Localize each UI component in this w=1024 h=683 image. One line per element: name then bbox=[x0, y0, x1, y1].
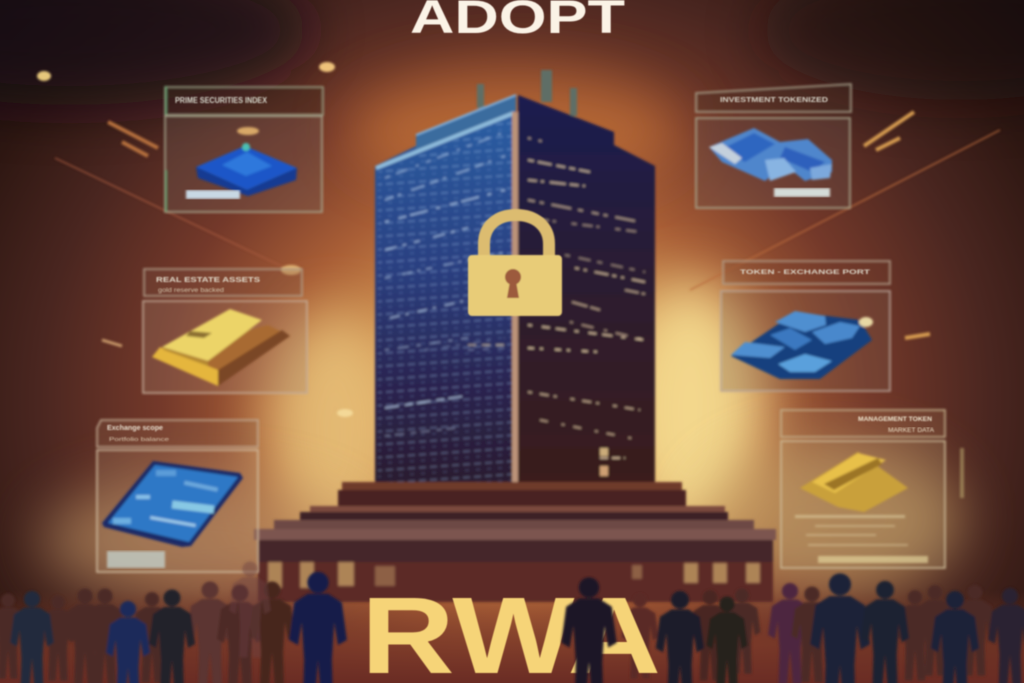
icon: tablet bbox=[102, 461, 243, 547]
small white tag bbox=[107, 551, 165, 568]
tower right face bbox=[518, 95, 655, 482]
panel heading: PRIME SECURITIES INDEX bbox=[175, 96, 268, 105]
panel: lower right gold: MARKET DATA bbox=[888, 428, 934, 434]
small white tag bbox=[774, 188, 830, 197]
panel: lower left tablet: Portfolio balance bbox=[109, 437, 169, 443]
panel heading: TOKEN - EXCHANGE PORT bbox=[740, 269, 870, 276]
icon: blue token bbox=[196, 127, 297, 196]
panel: top right asset bbox=[696, 84, 851, 208]
panel: middle right blue bbox=[721, 261, 890, 391]
center edge bbox=[512, 112, 518, 482]
data lines bbox=[795, 448, 964, 563]
panel heading: REAL ESTATE ASSETS bbox=[156, 275, 260, 284]
padlock icon bbox=[468, 215, 562, 316]
panel heading: Exchange scope bbox=[107, 423, 163, 432]
icon: blue bars bbox=[709, 128, 832, 181]
antennas bbox=[477, 70, 577, 116]
panel: lower right gold bbox=[781, 410, 964, 568]
figure in front of RWA bbox=[561, 577, 617, 683]
light beams and sparkles bbox=[37, 62, 1000, 417]
panel: lower left tablet bbox=[97, 420, 258, 572]
building: tower with stepped base bbox=[254, 70, 776, 602]
icon: flat gold bars bbox=[800, 452, 908, 512]
small white tag bbox=[186, 190, 240, 199]
crowd bbox=[0, 562, 1024, 683]
panel: top left asset bbox=[165, 86, 323, 212]
panel heading: MANAGEMENT TOKEN bbox=[858, 416, 932, 423]
icon: gold bars bbox=[152, 309, 290, 386]
panel: middle left gold: gold reserve backed bbox=[158, 288, 224, 294]
panel heading: INVESTMENT TOKENIZED bbox=[720, 97, 828, 104]
icon: blue blocks bbox=[731, 311, 873, 379]
panel: middle left gold bbox=[143, 269, 307, 393]
tower left face bbox=[375, 95, 516, 482]
stepped base bbox=[254, 482, 776, 602]
